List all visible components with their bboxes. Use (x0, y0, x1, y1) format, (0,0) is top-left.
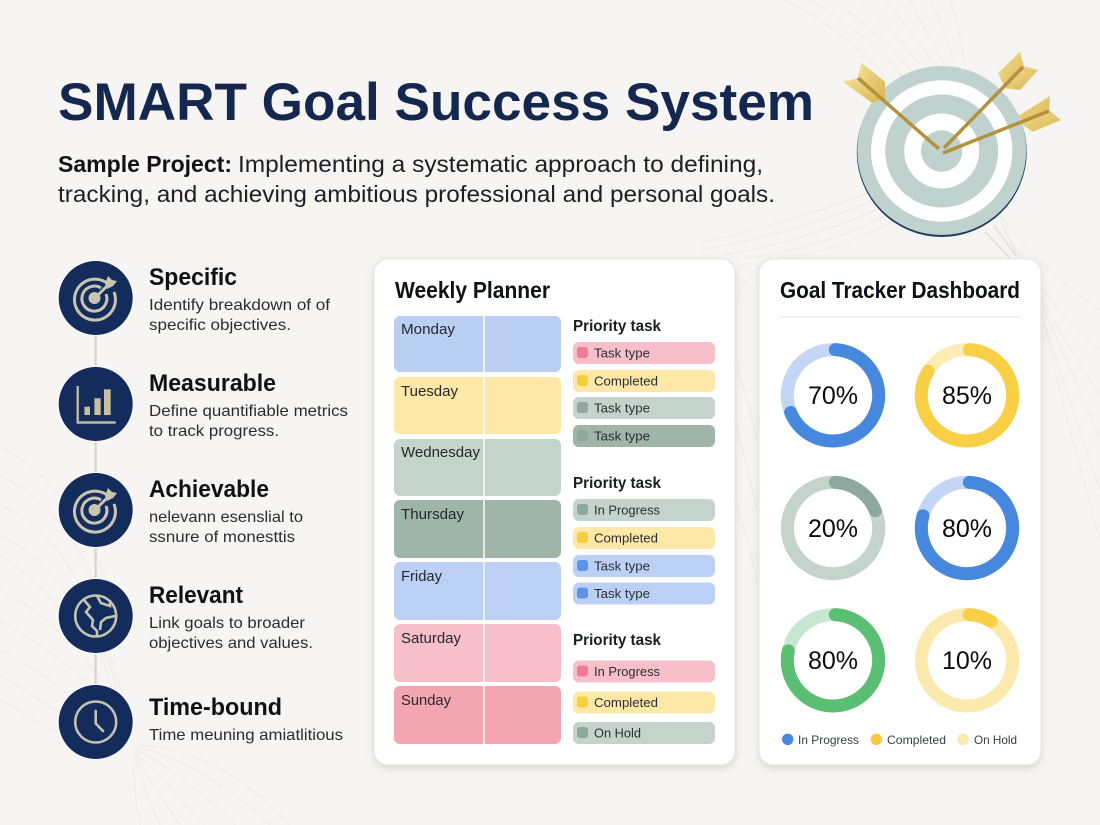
legend: Completed (887, 733, 946, 747)
description (149, 509, 303, 546)
subtitle: Implementing a systematic approach to defining, (238, 151, 763, 177)
day grid: Wednesday (401, 444, 480, 461)
step: Achievable (58, 472, 303, 548)
legend: In Progress (798, 733, 859, 747)
priority group 2: Completed (594, 532, 658, 546)
donut: 80% green: 80% (808, 647, 858, 675)
legend (782, 733, 1017, 747)
donut: 70% (785, 347, 881, 443)
priority group 1 (573, 318, 715, 447)
priority group 1: Priority task (573, 318, 661, 335)
day grid: Saturday (401, 630, 461, 647)
priority group 3: In Progress (594, 665, 660, 679)
planner heading: Weekly Planner (395, 277, 550, 303)
title: SMART Goal Success System (58, 73, 814, 132)
step: Time-bound (58, 684, 343, 760)
day grid: Sunday (401, 692, 451, 709)
description: to track progress. (149, 423, 279, 440)
description (149, 615, 313, 652)
priority group 2: Task type (594, 587, 650, 601)
priority group 3: Priority task (573, 632, 661, 649)
icon: clock (58, 684, 134, 760)
priority group 3 (573, 632, 715, 744)
day grid: Tuesday (401, 383, 458, 400)
heading: Achievable (149, 476, 269, 503)
description: objectives and values. (149, 635, 313, 652)
heading: Specific (149, 264, 237, 291)
description: Time meuning amiatlitious (149, 727, 343, 744)
description (149, 403, 348, 440)
donut: 70%: 70% (808, 382, 858, 410)
icon: globe (58, 578, 134, 654)
step connector line (95, 330, 97, 700)
icon: bar chart (58, 366, 134, 442)
icon: target with three arrows (843, 52, 1061, 237)
priority group 3: On Hold (594, 726, 641, 740)
priority group 1: Completed (594, 374, 658, 388)
heading: Relevant (149, 582, 243, 609)
priority group 2: In Progress (594, 504, 660, 518)
donut: 20% (785, 480, 881, 576)
donut: 10%: 10% (942, 647, 992, 675)
step: Measurable (58, 366, 348, 442)
priority group 1: Task type (594, 346, 650, 360)
day grid: Monday (401, 321, 455, 338)
priority group 2: Task type (594, 560, 650, 574)
priority group 2 (573, 475, 715, 604)
donut: 10% (919, 612, 1015, 708)
priority group 1: Task type (594, 402, 650, 416)
priority group 1: Task type (594, 430, 650, 444)
description: ssnure of monesttis (149, 529, 295, 546)
day grid: Friday (401, 568, 442, 585)
subtitle (58, 151, 775, 207)
priority group 3: Completed (594, 696, 658, 710)
step: Specific (58, 260, 331, 336)
donut: 80% green (785, 612, 881, 708)
description: Define quantifiable metrics (149, 403, 348, 420)
panel: weekly planner (374, 259, 735, 765)
description (149, 297, 331, 334)
heading: Time-bound (149, 694, 282, 721)
donut: 85%: 85% (942, 382, 992, 410)
description: Link goals to broader (149, 615, 306, 632)
panel: goal tracker dashboard (759, 259, 1041, 765)
icon: target (58, 472, 134, 548)
subtitle: Sample Project: (58, 151, 232, 177)
donut: 20%: 20% (808, 515, 858, 543)
donut: 85% (919, 347, 1015, 443)
subtitle: tracking, and achieving ambitious professional and personal goals. (58, 181, 775, 207)
description: Identify breakdown of of (149, 297, 331, 314)
day grid (394, 316, 561, 744)
donut: 80% blue (919, 480, 1015, 576)
dashboard heading: Goal Tracker Dashboard (780, 277, 1020, 303)
icon: target (58, 260, 134, 336)
donut: 80% blue: 80% (942, 515, 992, 543)
description: specific objectives. (149, 317, 291, 334)
legend: On Hold (974, 733, 1017, 747)
priority group 2: Priority task (573, 475, 661, 492)
day grid: Thursday (401, 506, 464, 523)
description: nelevann esenslial to (149, 509, 303, 526)
heading: Measurable (149, 370, 276, 397)
step: Relevant (58, 578, 313, 654)
